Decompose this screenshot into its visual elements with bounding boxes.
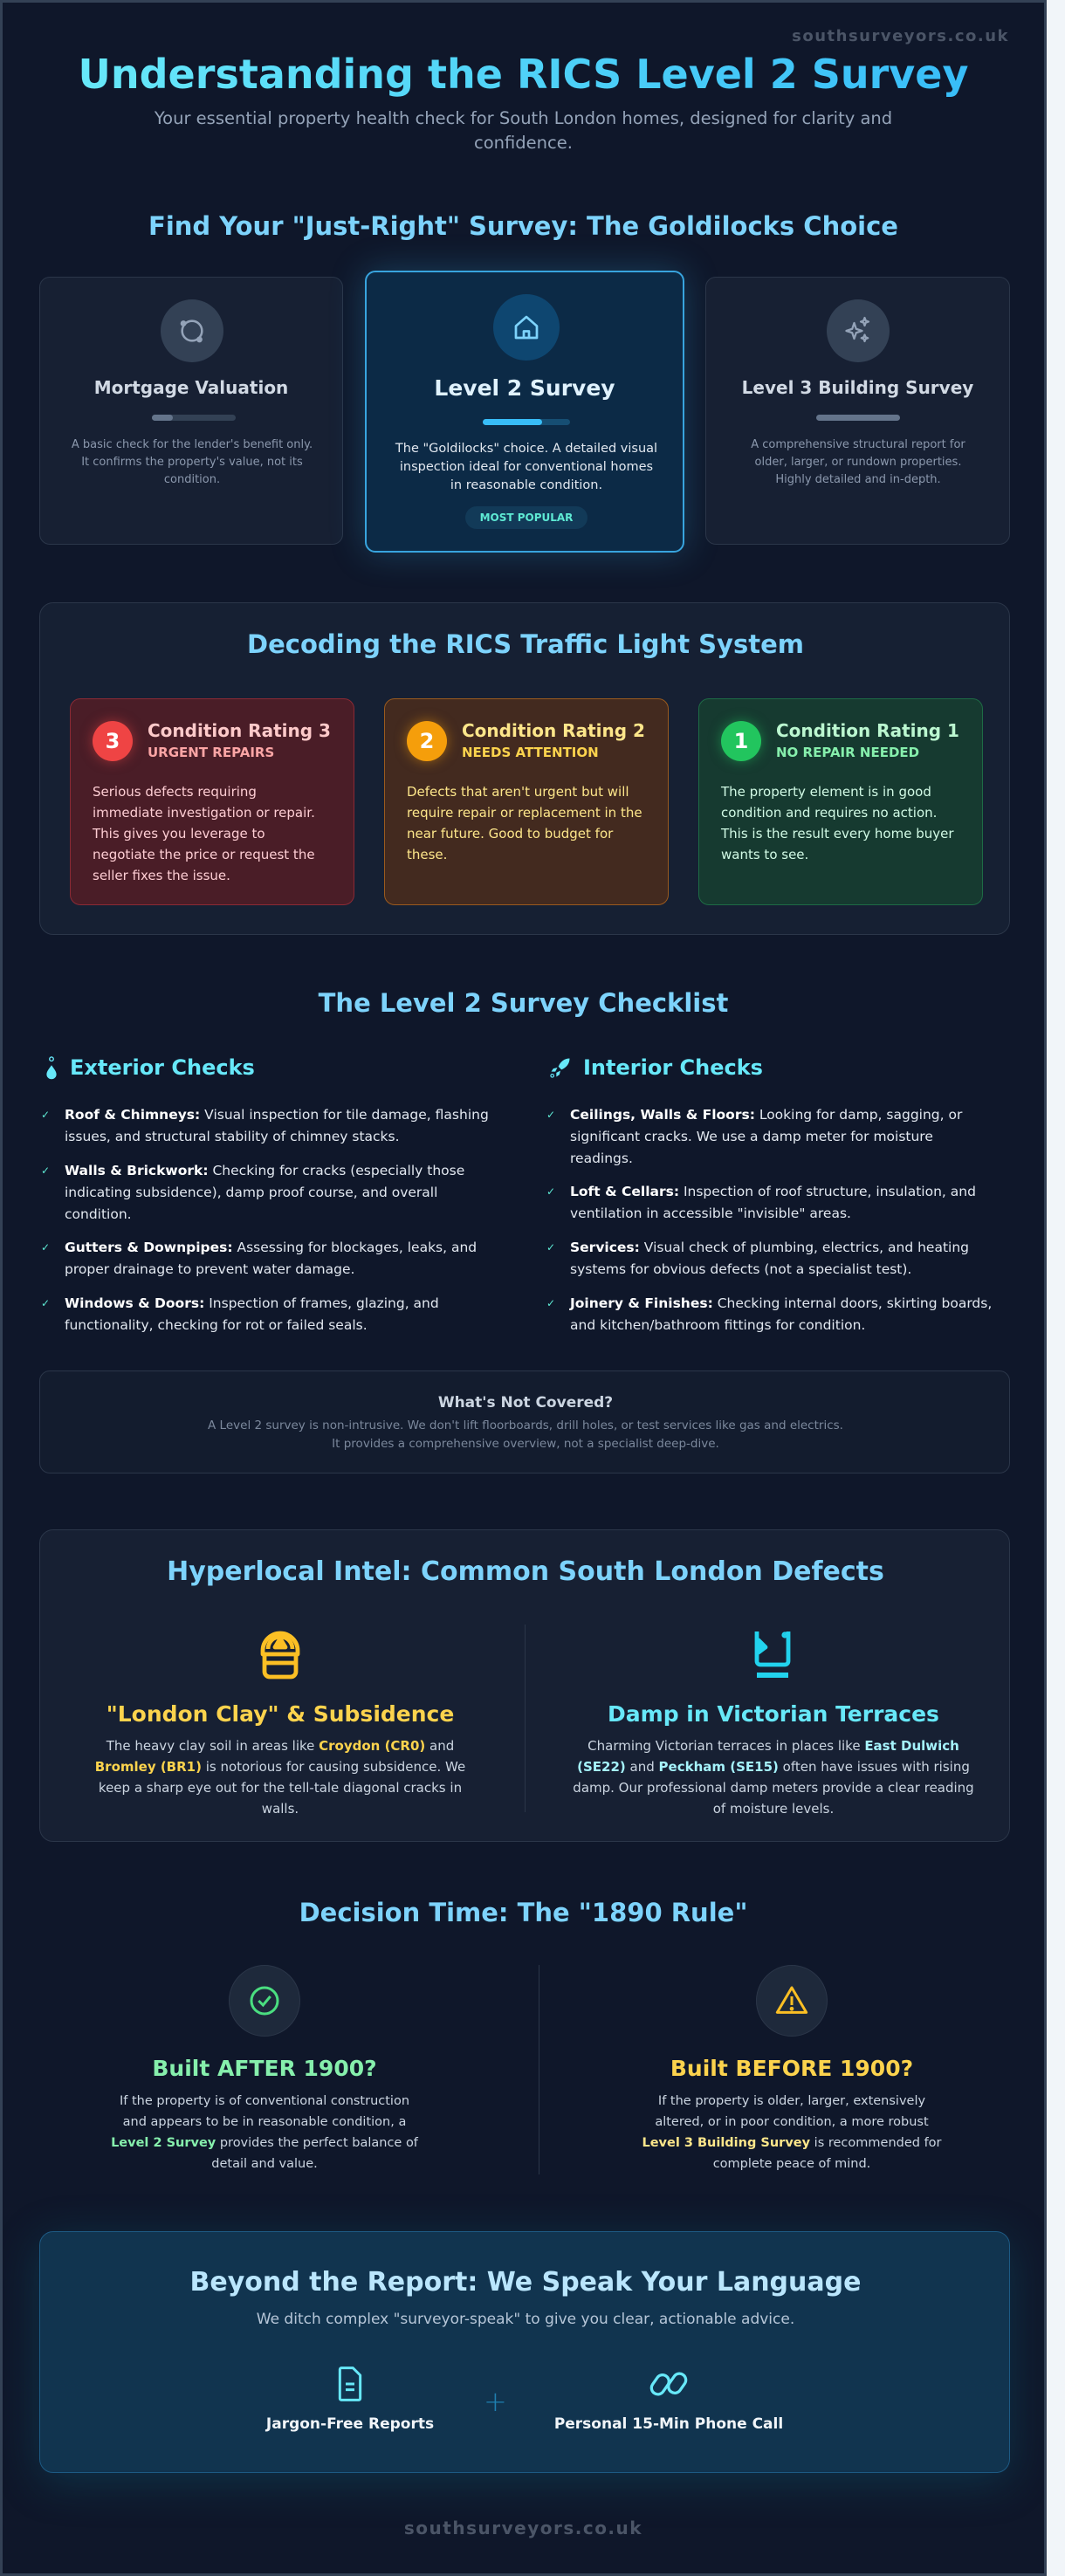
subtitle: Built AFTER 1900? <box>152 2056 377 2081</box>
card: rating 3: Condition Rating 3 <box>148 720 331 741</box>
column: london clay <box>95 1631 465 1817</box>
text: ✓ <box>546 1297 555 1309</box>
card title: Level 3 Building Survey <box>742 377 973 398</box>
column: before 1900 <box>642 1965 942 2171</box>
interior items: Joinery & Finishes: Checking internal doors, skirting boards, and kitchen/bathroom fittings for condition. <box>570 1295 992 1333</box>
text: If the property is of conventional construction and appears to be in reasonable condition, a Level 2 Survey provides the perfect balance of detail and value. <box>111 2094 418 2171</box>
icon: hard hat <box>260 1631 300 1680</box>
interior items: Ceilings, Walls & Floors: Looking for damp, sagging, or significant cracks. We use a damp meter for moisture readings. <box>570 1107 962 1166</box>
interior heading: Interior Checks <box>583 1055 763 1080</box>
icon: refresh <box>161 299 223 362</box>
bar <box>152 415 236 421</box>
text: Charming Victorian terraces in places like East Dulwich (SE22) and Peckham (SE15) often have issues with rising damp. Our professional damp meters provide a clear reading of moisture levels. <box>573 1738 974 1817</box>
card: rating 2: Defects that aren't urgent but will require repair or replacement in the near future. Good to budget for these. <box>407 784 642 862</box>
bar <box>816 415 900 421</box>
card: rating 1: The property element is in good condition and requires no action. This is the result every home buyer wants to see. <box>721 784 953 862</box>
feature: phone call <box>554 2373 783 2433</box>
subtitle: Built BEFORE 1900? <box>670 2056 913 2081</box>
exterior items: Roof & Chimneys: Visual inspection for tile damage, flashing issues, and structural stability of chimney stacks. <box>65 1107 489 1144</box>
exterior items: Walls & Brickwork: Checking for cracks (especially those indicating subsidence), damp proof course, and overall condition. <box>65 1163 464 1222</box>
number badge: 2 <box>420 729 434 753</box>
card: rating 1: NO REPAIR NEEDED <box>776 745 919 760</box>
card text: A basic check for the lender's benefit only. It confirms the property's value, not its condition. <box>72 438 313 486</box>
heading: Beyond the Report: We Speak Your Language <box>190 2267 861 2298</box>
number badge <box>93 721 133 761</box>
panel: mortgage valuation card <box>39 277 343 545</box>
text: If the property is older, larger, extensively altered, or in poor condition, a more robust Level 3 Building Survey is recommended for complete peace of mind. <box>642 2094 942 2171</box>
panel: hyperlocal <box>39 1529 1010 1842</box>
card: rating 1 <box>698 698 983 905</box>
interior items <box>546 1107 992 1333</box>
icon: link <box>649 2373 688 2395</box>
feature: jargon-free: Jargon-Free Reports <box>266 2415 434 2433</box>
subtitle: We ditch complex "surveyor-speak" to give you clear, actionable advice. <box>257 2311 794 2328</box>
icon: check circle <box>229 1965 300 2037</box>
column: after 1900 <box>111 1965 419 2171</box>
subtitle: "London Clay" & Subsidence <box>106 1701 454 1727</box>
exterior items: Gutters & Downpipes: Assessing for blockages, leaks, and proper drainage to prevent water damage. <box>65 1240 477 1277</box>
heading: Decoding the RICS Traffic Light System <box>247 629 804 659</box>
icon: warning <box>756 1965 828 2037</box>
badge <box>465 506 587 529</box>
text: ✓ <box>41 1241 50 1254</box>
card title: Mortgage Valuation <box>94 377 288 398</box>
card: rating 2 <box>384 698 669 905</box>
heading: checklist: The Level 2 Survey Checklist <box>319 988 728 1018</box>
exterior heading: Exterior Checks <box>70 1055 255 1080</box>
card: rating 1: Condition Rating 1 <box>776 720 959 741</box>
panel: beyond the report <box>39 2231 1010 2473</box>
icon: house <box>493 294 560 361</box>
exterior items: Windows & Doors: Inspection of frames, glazing, and functionality, checking for rot or failed seals. <box>65 1295 439 1333</box>
footer domain: southsurveyors.co.uk <box>404 2518 642 2538</box>
subtitle: Your essential property health check for South London homes, designed for clarity and confidence. <box>155 108 892 153</box>
badge: MOST POPULAR <box>480 512 573 524</box>
card: rating 2: Condition Rating 2 <box>462 720 645 741</box>
domain label top: southsurveyors.co.uk <box>792 27 1009 45</box>
divider <box>525 1625 526 1812</box>
callout: not covered: It provides a comprehensive overview, not a specialist deep-dive. <box>332 1437 719 1451</box>
subtitle: Damp in Victorian Terraces <box>608 1701 939 1727</box>
card: rating 3: URGENT REPAIRS <box>148 745 274 760</box>
card: rating 3 <box>70 698 354 905</box>
number badge: 3 <box>106 729 120 753</box>
text: ✓ <box>41 1109 50 1121</box>
heading: decision time: Decision Time: The "1890 Rule" <box>299 1898 747 1927</box>
text: ✓ <box>41 1297 50 1309</box>
feature: jargon-free <box>265 2366 434 2433</box>
text: The heavy clay soil in areas like Croydon (CR0) and Bromley (BR1) is notorious for causing subsidence. We keep a sharp eye out for the tell-tale diagonal cracks in walls. <box>95 1738 465 1817</box>
number badge <box>407 721 447 761</box>
number badge <box>721 721 761 761</box>
icon: damp meter <box>754 1631 791 1678</box>
card: rating 2: NEEDS ATTENTION <box>462 745 599 760</box>
text: ✓ <box>546 1109 555 1121</box>
feature: phone call: Personal 15-Min Phone Call <box>554 2415 783 2433</box>
text: ✓ <box>546 1185 555 1198</box>
heading: goldilocks: Find Your "Just-Right" Survey: The Goldilocks Choice <box>148 211 898 241</box>
interior items: Services: Visual check of plumbing, electrics, and heating systems for obvious defects (not a specialist test). <box>570 1240 969 1277</box>
interior items: Loft & Cellars: Inspection of roof structure, insulation, and ventilation in accessible "invisible" areas. <box>570 1184 976 1221</box>
number badge: 1 <box>734 729 748 753</box>
plus sign: + <box>484 2385 507 2418</box>
callout: not covered: What's Not Covered? <box>438 1394 613 1412</box>
title: Understanding the RICS Level 2 Survey <box>79 51 968 98</box>
bar <box>483 419 570 425</box>
card text: The "Goldilocks" choice. A detailed visual inspection ideal for conventional homes in reasonable condition. <box>395 442 657 492</box>
panel: traffic light system <box>39 602 1010 935</box>
panel: level 3 card <box>705 277 1010 545</box>
icon: document <box>339 2366 361 2401</box>
callout: not covered <box>39 1370 1010 1473</box>
icon: sparkles <box>827 299 890 362</box>
card title: Level 2 Survey <box>434 375 615 401</box>
card text: A comprehensive structural report for older, larger, or rundown properties. Highly detailed and in-depth. <box>751 438 965 486</box>
heading: Hyperlocal Intel: Common South London Defects <box>167 1556 884 1587</box>
exterior items <box>41 1107 489 1333</box>
panel: level 2 card <box>365 271 684 553</box>
card: rating 3: Serious defects requiring immediate investigation or repair. This gives you leverage to negotiate the price or request the seller fixes the issue. <box>93 784 315 883</box>
text: ✓ <box>41 1164 50 1177</box>
callout: not covered: A Level 2 survey is non-intrusive. We don't lift floorboards, drill holes, or test services like gas and electrics. <box>208 1419 843 1432</box>
text: ✓ <box>546 1241 555 1254</box>
column: damp <box>573 1631 974 1817</box>
